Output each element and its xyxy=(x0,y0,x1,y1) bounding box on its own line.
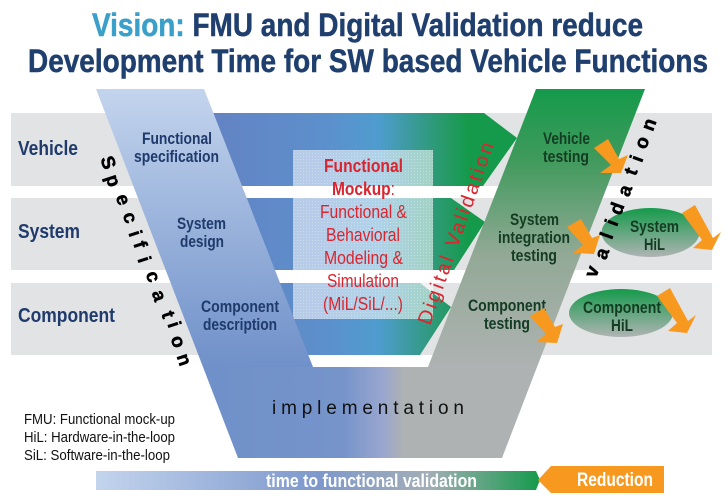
validation label: t xyxy=(621,165,643,178)
validation label: i xyxy=(602,217,623,229)
abbreviations legend: SiL: Software-in-the-loop xyxy=(24,448,170,464)
validation labels: integration xyxy=(498,229,570,247)
specification label: i xyxy=(133,254,154,266)
level bands xyxy=(11,113,712,355)
validation label: i xyxy=(627,153,648,165)
functional mockup text: Functional & xyxy=(320,202,407,222)
specification arm xyxy=(96,89,313,367)
specification label: c xyxy=(141,269,164,286)
specification label: f xyxy=(129,239,151,252)
validation labels: testing xyxy=(543,148,589,166)
specification label: o xyxy=(166,333,189,351)
validation label: a xyxy=(614,182,637,199)
validation labels: HiL xyxy=(611,317,633,335)
validation label: v xyxy=(581,263,604,280)
functional mockup box xyxy=(293,150,433,319)
specification label: a xyxy=(147,288,170,305)
specification labels xyxy=(134,130,279,334)
level labels: Vehicle xyxy=(18,137,78,160)
abbreviations legend: HiL: Hardware-in-the-loop xyxy=(24,430,175,446)
validation label: n xyxy=(638,116,661,134)
specification labels: Component xyxy=(201,298,279,316)
validation label: l xyxy=(597,230,618,242)
validation labels: Vehicle xyxy=(543,130,590,148)
implementation label: implementation xyxy=(272,398,464,419)
specification label: e xyxy=(111,192,134,208)
specification label: i xyxy=(163,319,184,331)
validation labels xyxy=(468,130,679,335)
validation labels: Component xyxy=(583,299,661,317)
functional mockup text: (MiL/SiL/...) xyxy=(323,294,403,314)
HiL ellipses xyxy=(569,208,700,337)
validation labels: System xyxy=(510,211,559,229)
functional mockup text xyxy=(320,156,407,314)
level labels: System xyxy=(18,220,80,243)
functional mockup text: Modeling & xyxy=(324,248,403,268)
title xyxy=(28,7,708,79)
time bar label: time to functional validation xyxy=(266,470,477,491)
validation label: o xyxy=(631,134,654,152)
digital validation connectors xyxy=(200,113,517,355)
functional mockup text: Behavioral xyxy=(326,225,400,245)
level labels: Component xyxy=(18,304,115,327)
specification label xyxy=(96,154,195,369)
orange reduction arrows xyxy=(530,139,721,343)
validation label: a xyxy=(591,245,614,262)
specification label: p xyxy=(101,172,124,190)
digital validation label: Digital Validation xyxy=(414,139,499,328)
validation label xyxy=(581,116,661,280)
validation labels: testing xyxy=(484,315,530,333)
validation label: d xyxy=(606,200,629,218)
specification label: S xyxy=(96,154,119,172)
time bar xyxy=(96,466,664,493)
functional mockup text: Simulation xyxy=(327,271,399,291)
abbreviations legend: FMU: Functional mock-up xyxy=(24,412,175,428)
functional mockup text: Functional xyxy=(324,156,403,176)
specification labels: design xyxy=(180,233,224,251)
specification labels: System xyxy=(177,215,226,233)
level labels xyxy=(18,137,115,327)
specification label: t xyxy=(157,309,179,322)
validation labels: System xyxy=(630,218,679,236)
specification labels: Functional xyxy=(142,130,212,148)
validation labels: testing xyxy=(511,247,557,265)
reduction arrow xyxy=(538,466,664,493)
abbreviations legend xyxy=(24,412,175,464)
functional mockup text: Mockup: xyxy=(332,179,395,199)
validation arm xyxy=(428,89,645,367)
implementation base xyxy=(203,367,537,458)
specification labels: description xyxy=(203,316,277,334)
validation labels: Component xyxy=(468,297,546,315)
specification labels: specification xyxy=(134,148,219,166)
specification label: c xyxy=(118,210,141,227)
validation labels: HiL xyxy=(644,236,665,254)
specification label: n xyxy=(172,351,195,369)
specification label: i xyxy=(124,228,145,240)
title: Vision: FMU and Digital Validation reduce xyxy=(92,7,643,43)
reduction label: Reduction xyxy=(577,470,653,491)
